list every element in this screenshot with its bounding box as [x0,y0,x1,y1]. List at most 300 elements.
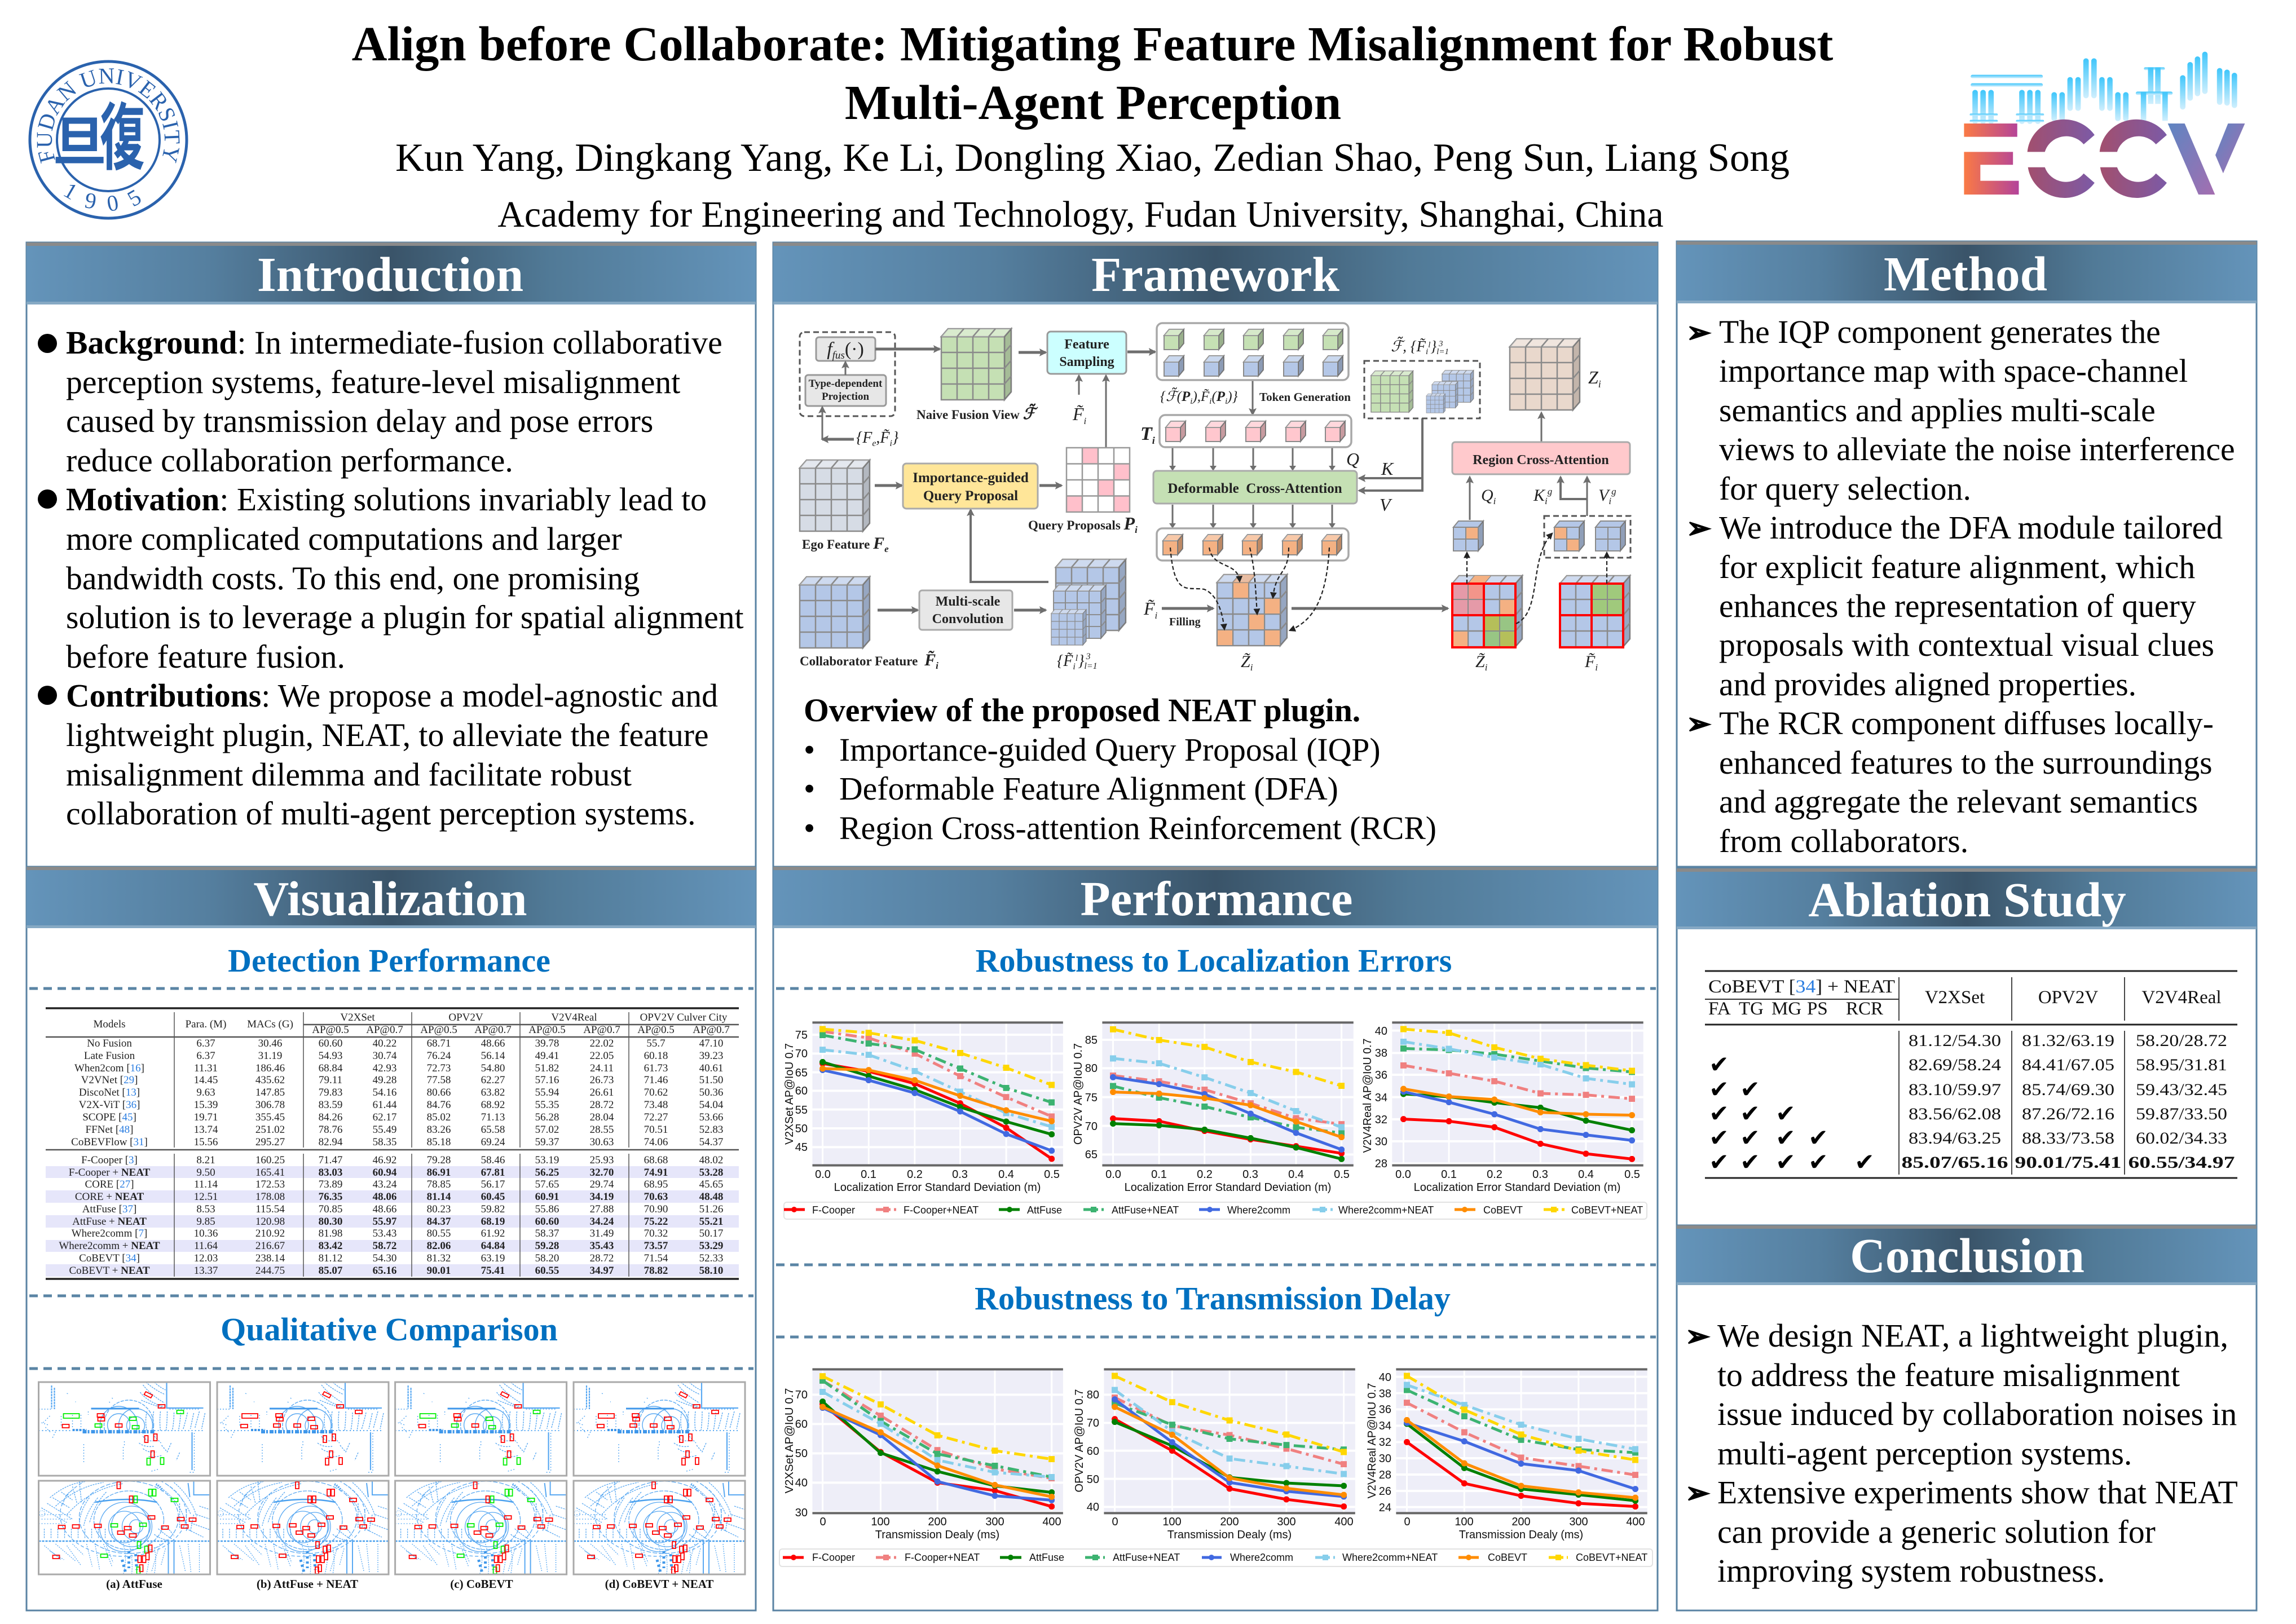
table: ablation results: 83.94/63.25 [1909,1129,2001,1148]
line chart: localization error OPV2V: 65 [1085,1149,1098,1161]
dashed box: fusion function: (·) [845,339,864,360]
table: ablation results: ✔ [1740,1148,1760,1176]
heading: Method: Method [1884,246,2047,301]
table: detection performance: 70.32 [644,1228,668,1239]
line chart: transmission delay V2XSet: 0 [819,1516,826,1528]
table: detection performance: V2XSet [340,1012,375,1023]
label: token generation: ),F̃ [1191,389,1210,404]
table: ablation results: OPV2V [2038,987,2098,1008]
table: ablation results: ✔ [1775,1148,1796,1176]
arrows: token flow heads [1169,466,1336,528]
block: multi-scale feature stack: {F̃ [1057,652,1073,670]
label: token generation: i [1209,397,1211,406]
table: detection performance: AP@0.7 [474,1024,512,1036]
table: detection performance: 81.98 [319,1228,342,1239]
panel: Framework [773,242,1658,867]
table: detection performance: CoBEVT [34] [79,1252,140,1264]
table: detection performance: 54.30 [373,1252,396,1264]
table: detection performance: AP@0.5 [420,1024,457,1036]
table: detection performance: 46.92 [373,1154,396,1166]
table: detection performance: 58.10 [699,1265,723,1277]
table: detection performance: 68.19 [481,1216,505,1228]
table: detection performance: 71.46 [644,1074,668,1086]
table: detection performance: 32.70 [590,1167,614,1179]
table: detection performance: 435.62 [255,1074,285,1086]
table: detection performance: 15.39 [194,1099,218,1111]
subheading: detection performance: Detection Performance [228,942,550,979]
line chart: localization error OPV2V: 0.2 [1197,1168,1213,1181]
table: detection performance: 68.84 [319,1062,343,1074]
table: detection performance: 85.02 [427,1111,451,1123]
table: detection performance: 39.23 [699,1050,723,1062]
dashed box: fusion function: f [827,339,845,361]
table: ablation results: ✔ [1854,1148,1875,1176]
text block: overview of plugin: Deformable Feature Alignment (DFA) [839,771,1338,807]
line chart: transmission delay OPV2V: 200 [1220,1516,1239,1528]
table: detection performance: When2com [16] [74,1062,144,1074]
logo: Fudan University seal: FUDAN UNIVERSITY [37,68,179,164]
image: CoBEVT+NEAT scene 1 [574,1382,745,1476]
legend: delay charts: CoBEVT [1488,1552,1527,1563]
table: detection performance: AP@0.5 [528,1024,566,1036]
table: detection performance: AP@0.7 [693,1024,730,1036]
table: detection performance: 80.30 [319,1216,342,1228]
dashed box: multi-scale inputs: l=1 [1436,347,1449,356]
dashed box: multi-scale inputs: i [1426,347,1428,356]
legend: localization charts: CoBEVT+NEAT [1571,1204,1643,1216]
image: CoBEVT scene 2 [395,1473,567,1574]
logo: Fudan University seal: 1905 [64,185,141,211]
table: detection performance: Where2comm [7] [72,1228,147,1239]
legend: delay charts: AttFuse+NEAT [1113,1552,1180,1563]
table: ablation results: 81.12/54.30 [1909,1031,2001,1050]
table: detection performance: 45.65 [699,1179,723,1190]
line chart: localization error V2XSet: 0.4 [998,1168,1014,1181]
line chart: transmission delay OPV2V: 60 [1087,1445,1099,1458]
table: ablation results: CoBEVT [ 34] + NEAT [1708,977,1895,997]
table: detection performance: 68.71 [427,1038,451,1049]
table: detection performance: 31.49 [590,1228,614,1239]
text block: method bullets: enhances the representation of query [1719,589,2196,624]
line chart: localization error OPV2V: 0.5 [1334,1168,1350,1181]
image: CoBEVT scene 1 [395,1382,567,1476]
dashed box: multi-scale inputs: ℱ̃, {F̃ [1391,338,1426,355]
heading: Visualization: Visualization [254,871,527,926]
label: F input: {F [856,429,872,447]
table: detection performance: 56.14 [481,1050,505,1062]
table: detection performance: 12.51 [194,1191,218,1203]
labels: Q K V: V [1380,495,1392,515]
table: ablation results: 59.43/32.45 [2136,1080,2227,1099]
table: detection performance: 34.97 [590,1265,614,1277]
line chart: localization error OPV2V: 0.1 [1151,1168,1167,1181]
labels: Q K V superscripts: g [1548,486,1552,497]
table: ablation results: 90.01/75.41 [2015,1153,2122,1172]
labels: Q K V: K [1381,458,1394,479]
table: ablation results: 88.33/73.58 [2022,1129,2114,1148]
table: detection performance: 42.93 [373,1062,396,1074]
text block: overview of plugin: Overview of the proposed NEAT plugin. [804,693,1360,729]
text block: method bullets: ➢ [1686,316,1711,350]
table: ablation results: V2XSet [1925,987,1985,1008]
table: detection performance: 8.21 [196,1154,215,1166]
table: detection performance: 48.66 [373,1203,396,1215]
table: detection performance: 160.25 [255,1154,285,1166]
block: aligned feature with red regions [1452,576,1522,673]
table: detection performance: 67.81 [481,1167,505,1179]
text block: conclusion bullets: improving system robustness. [1717,1554,2105,1589]
table: detection performance: 84.76 [427,1099,451,1111]
block: final feature Z: i [1598,378,1601,390]
table: detection performance: 49.28 [373,1074,396,1086]
line chart: transmission delay V2XSet: 60 [795,1418,808,1431]
table: detection performance: 63.82 [481,1087,505,1098]
table: detection performance: 295.27 [255,1136,285,1148]
text block: method bullets: The RCR component diffuses locally- [1719,706,2214,742]
table: detection performance: 79.28 [427,1154,451,1166]
table: ablation results: ✔ [1775,1100,1796,1127]
text block: method bullets: for explicit feature alignment, which [1719,550,2195,585]
labels: Q K V superscripts: g [1611,486,1616,497]
table: ablation results: 81.32/63.19 [2022,1031,2114,1050]
table: detection performance: 39.78 [535,1038,559,1049]
line chart: localization error V2V4Real [1361,1022,1643,1194]
table: detection performance: 82.06 [427,1240,451,1252]
table: detection performance: 355.45 [255,1111,285,1123]
labels: Q K V superscripts: i [1545,496,1548,506]
table: ablation results: ✔ [1709,1148,1729,1176]
text block: introduction bullets: Motivation: Existing solutions invariably lead to [66,482,707,518]
table: detection performance: 61.44 [373,1099,397,1111]
dashed box: fusion function [800,332,895,416]
table: detection performance: 71.47 [319,1154,342,1166]
table: detection performance: 56.25 [535,1167,559,1179]
label: F input: i [890,439,892,448]
heading: Introduction: Introduction [257,247,523,302]
image: AttFuse+NEAT scene 1 [217,1382,389,1476]
block: collaborator feature: i [936,660,938,671]
table: detection performance: OPV2V Culver City [640,1012,728,1023]
label: token generation: )} [1226,389,1238,404]
table: detection performance: 56.17 [481,1179,505,1190]
table: detection performance: 56.28 [535,1111,559,1123]
table: detection performance: 83.03 [319,1167,342,1179]
line chart: transmission delay V2XSet: 70 [795,1389,808,1401]
table: ablation results: ✔ [1740,1075,1760,1103]
line chart: localization error V2V4Real: Localization Error Standard Deviation (m) [1414,1181,1620,1194]
table: ablation results: ✔ [1709,1100,1729,1127]
logo: Fudan University seal: 復 [100,80,145,186]
legend: delay charts: CoBEVT+NEAT [1576,1552,1647,1563]
table: detection performance: AP@0.5 [312,1024,349,1036]
table: ablation results: 82.69/58.24 [1909,1056,2001,1074]
text block: overview of plugin: Importance-guided Query Proposal (IQP) [839,732,1381,768]
table: detection performance: 47.10 [699,1038,723,1049]
table: ablation results: TG [1739,999,1764,1019]
table: detection performance: AttFuse + NEAT [72,1216,147,1228]
table: detection performance: 54.80 [481,1062,505,1074]
table: ablation results: 87.26/72.16 [2022,1105,2114,1123]
table: detection performance: 82.94 [319,1136,343,1148]
line chart: localization error V2XSet: 0.1 [861,1168,876,1181]
line chart: localization error V2V4Real: 0.3 [1532,1168,1548,1181]
legend: localization charts [784,1202,1647,1219]
label: token generation: {ℱ̃(P [1160,389,1190,404]
line chart: transmission delay V2V4Real: 32 [1379,1436,1391,1449]
line chart: transmission delay V2V4Real: 100 [1455,1516,1474,1528]
affiliation: Academy for Engineering and Technology, Fudan University, Shanghai, China [497,194,1664,235]
table: detection performance: 83.42 [319,1240,342,1252]
block: multi-scale feature stack: } [1078,652,1084,670]
table: ablation results: 83.56/62.08 [1909,1105,2001,1123]
table: detection performance: 80.23 [427,1203,451,1215]
block: multi-scale feature stack: i [1073,662,1076,672]
table: detection performance: 73.57 [644,1240,668,1252]
table: detection performance: 55.35 [535,1099,559,1111]
line chart: localization error V2XSet: 0.0 [815,1168,831,1181]
table: detection performance: 40.22 [373,1038,396,1049]
box: region cross-attention: Region Cross-Attention [1473,453,1609,467]
text block: method bullets: ➢ [1686,511,1711,545]
arrows: dashed token filling [1170,533,1607,630]
table: detection performance: FFNet [48] [86,1124,133,1136]
text block: method bullets: ➢ [1686,707,1711,741]
legend: delay charts [779,1549,1652,1566]
table: detection performance: 178.08 [255,1191,285,1203]
table: detection performance: 244.75 [255,1265,285,1277]
text block: method bullets: and provides aligned properties. [1719,667,2136,703]
text block: method bullets: for query selection. [1719,471,1971,507]
subheading: robustness to transmission delay: Robustness to Transmission Delay [975,1280,1451,1317]
line chart: transmission delay V2XSet: 30 [795,1507,808,1519]
table: detection performance: 71.54 [644,1252,668,1264]
table: ablation results: ✔ [1775,1124,1796,1151]
block: multi-scale feature stack: l=1 [1084,661,1098,671]
table: detection performance: V2X-ViT [36] [79,1099,140,1111]
label: token generation: ( [1211,389,1217,404]
line chart: transmission delay OPV2V: 50 [1087,1473,1099,1486]
table: detection performance [46,1008,739,1279]
table: detection performance: 80.55 [427,1228,451,1239]
table: detection performance: 51.26 [699,1203,723,1215]
block: small query block [1453,521,1483,551]
legend: localization charts: AttFuse+NEAT [1112,1204,1179,1216]
line chart: localization error V2XSet: 65 [795,1067,808,1079]
table: detection performance: 60.55 [535,1265,559,1277]
table: detection performance: 25.93 [590,1154,614,1166]
text block: method bullets: semantics and applies multi-scale [1719,393,2156,429]
legend: localization charts: AttFuse [1027,1204,1062,1216]
label: collaborator feature filling: i [1155,610,1158,621]
table: detection performance: 59.37 [535,1136,559,1148]
box: importance-guided query proposal: Importance-guided [913,470,1029,486]
table: detection performance: 60.18 [644,1050,668,1062]
logo: Fudan University seal [28,60,188,220]
legend: delay charts: Where2comm [1230,1552,1293,1563]
block: collaborator feature: Collaborator Feature F̃ [800,651,936,669]
table: detection performance: F-Cooper + NEAT [69,1167,150,1179]
table: ablation results: 85.07/65.16 [1902,1153,2008,1172]
table: detection performance: CoBEVT + NEAT [69,1265,150,1277]
table: detection performance: 53.43 [373,1228,396,1239]
dashed box: fusion function: Type-dependent [809,378,883,390]
table: detection performance: 19.71 [194,1111,218,1123]
table: ablation results: 60.02/34.33 [2136,1129,2227,1148]
table: detection performance: 9.85 [196,1216,215,1228]
box: importance-guided query proposal: Query Proposal [923,488,1018,504]
label: collaborator feature filling: Filling [1169,616,1201,628]
table: detection performance: 55.94 [535,1087,559,1098]
table: detection performance: AP@0.5 [637,1024,675,1036]
line chart: localization error V2V4Real: 32 [1375,1114,1387,1126]
table: detection performance: 74.91 [644,1167,668,1179]
table: detection performance: V2VNet [29] [81,1074,138,1086]
block: naive fusion view: Naive Fusion View ℱ̃ [916,403,1038,423]
captions [106,1577,713,1591]
table: detection performance: AttFuse [37] [82,1203,136,1215]
line chart: transmission delay OPV2V: 100 [1162,1516,1182,1528]
block: final feature Z [1510,339,1601,410]
table: detection performance: 54.16 [373,1087,396,1098]
table: ablation results: 83.10/59.97 [1909,1080,2001,1099]
captions: (b) AttFuse + NEAT [257,1577,358,1591]
line chart: transmission delay OPV2V: 300 [1277,1516,1296,1528]
table: detection performance: 54.93 [319,1050,342,1062]
table: detection performance: 63.19 [481,1252,505,1264]
labels: Q K V superscripts: i [1608,496,1611,506]
text block: conclusion bullets: ➢ [1685,1320,1710,1353]
table: detection performance: 14.45 [194,1074,218,1086]
table: detection performance: 70.62 [644,1087,668,1098]
table: detection performance: 120.98 [255,1216,285,1228]
box: multi-scale convolution: Multi-scale [936,594,1001,609]
table: detection performance: 48.06 [373,1191,396,1203]
text block: overview of plugin: • [804,732,815,768]
table: detection performance: 24.11 [590,1062,614,1074]
panel: Visualization [27,867,756,1610]
label: token generation: Token Generation [1259,390,1351,404]
line chart: localization error V2XSet: 75 [795,1029,808,1042]
table: ablation results: 59.87/33.50 [2136,1105,2227,1123]
table: detection performance: 10.36 [194,1228,218,1239]
panel: Introduction [27,242,756,867]
line chart: localization error V2V4Real: V2V4Real AP@IoU 0.7 [1361,1039,1374,1153]
block: filled feature [1217,575,1287,673]
table: detection performance: 50.36 [699,1087,723,1098]
line chart: transmission delay OPV2V: OPV2V AP@IoU 0.7 [1073,1389,1086,1492]
table: detection performance: 83.26 [427,1124,451,1136]
table: detection performance: 52.33 [699,1252,723,1264]
line chart: transmission delay V2XSet: Transmission Dealy (ms) [875,1529,999,1541]
table: detection performance: 79.83 [319,1087,342,1098]
text block: introduction bullets: lightweight plugin, NEAT, to alleviate the feature [66,718,709,753]
table: detection performance: 81.32 [427,1252,451,1264]
text block: introduction bullets: misalignment dilemma and facilitate robust [66,757,632,793]
table: detection performance: Para. (M) [186,1018,226,1030]
table: ablation results: ✔ [1709,1124,1729,1151]
label: token generation: i [1225,397,1227,406]
line chart: transmission delay OPV2V: Transmission Dealy (ms) [1167,1529,1292,1541]
image: AttFuse scene 2 [38,1473,210,1574]
text block: introduction bullets: collaboration of multi-agent perception systems. [66,796,696,832]
dashed box: multi-scale inputs: } [1430,338,1436,355]
text block: introduction bullets: Contributions: We propose a model-agnostic and [66,678,718,714]
table: detection performance: 55.97 [373,1216,397,1228]
table: detection performance: MACs (G) [247,1018,293,1030]
block: collaborator feature with red regions: F̃ [1585,652,1595,671]
box: multi-scale convolution [919,590,1012,630]
line chart: localization error V2V4Real: 36 [1375,1069,1387,1082]
line chart: transmission delay V2V4Real: 28 [1379,1469,1391,1481]
table: detection performance: 79.11 [319,1074,342,1086]
line chart: transmission delay V2V4Real: 36 [1379,1404,1391,1416]
label: F input [856,404,1087,448]
line chart: localization error V2XSet: 45 [795,1141,808,1154]
table: detection performance: 54.37 [699,1136,723,1148]
table: detection performance: 115.54 [255,1203,285,1215]
table: detection performance: 73.48 [644,1099,668,1111]
table: detection performance: 68.95 [644,1179,668,1190]
table: detection performance: AP@0.7 [583,1024,620,1036]
box: query tokens T: i [1152,435,1155,446]
table: detection performance: 75.41 [481,1265,505,1277]
table: detection performance: OPV2V [448,1012,483,1023]
table: detection performance: CoBEVFlow [31] [71,1136,148,1148]
table: detection performance: 78.85 [427,1179,451,1190]
table: detection performance: 28.72 [590,1099,614,1111]
table: ablation results: PS [1807,999,1828,1019]
line chart: localization error V2XSet: V2XSet AP@IoU 0.7 [783,1043,796,1145]
table: detection performance: 51.50 [699,1074,723,1086]
table: detection performance: 13.37 [194,1265,218,1277]
text block: introduction bullets [38,325,744,832]
label: token generation: P [1216,389,1226,404]
table: detection performance: 9.50 [196,1167,215,1179]
block: filled feature: i [1250,662,1253,673]
panel: Ablation Study [1677,868,2257,1225]
heading: Performance: Performance [1080,871,1353,926]
table: ablation results: RCR [1846,999,1883,1019]
line chart: transmission delay V2V4Real: 0 [1404,1516,1411,1528]
text block: overview of plugin: • [804,811,815,846]
table: ablation results: 58.95/31.81 [2136,1056,2227,1074]
line chart: localization error V2XSet: 60 [795,1085,808,1097]
table: detection performance: 60.94 [373,1167,397,1179]
labels: Q K V superscripts [1481,486,1616,506]
table: detection performance: CORE + NEAT [75,1191,144,1203]
grid: query proposals: Query Proposals P [1028,513,1135,533]
captions: (a) AttFuse [106,1577,162,1591]
table: detection performance: 68.92 [481,1099,505,1111]
box: feature sampling [1047,332,1126,374]
table: detection performance: 83.59 [319,1099,342,1111]
table: detection performance: 78.82 [644,1265,668,1277]
line chart: transmission delay V2V4Real [1366,1369,1647,1541]
box: refined tokens [1157,528,1348,561]
line chart: localization error V2V4Real: 30 [1375,1136,1387,1148]
table: detection performance: 52.83 [699,1124,723,1136]
label: token generation: i [1190,397,1192,406]
text block: method bullets: from collaborators. [1719,824,1968,859]
line chart: transmission delay OPV2V: 80 [1087,1389,1099,1401]
block: aligned feature with red regions: Z̃ [1475,652,1485,671]
legend: delay charts: F-Cooper+NEAT [905,1552,980,1563]
table: detection performance: 11.31 [194,1062,218,1074]
text block: conclusion bullets: We design NEAT, a lightweight plugin, [1717,1318,2228,1354]
table: detection performance: 73.89 [319,1179,342,1190]
box: ego feature: Ego Feature F [802,534,884,553]
legend: delay charts: F-Cooper [812,1552,855,1563]
